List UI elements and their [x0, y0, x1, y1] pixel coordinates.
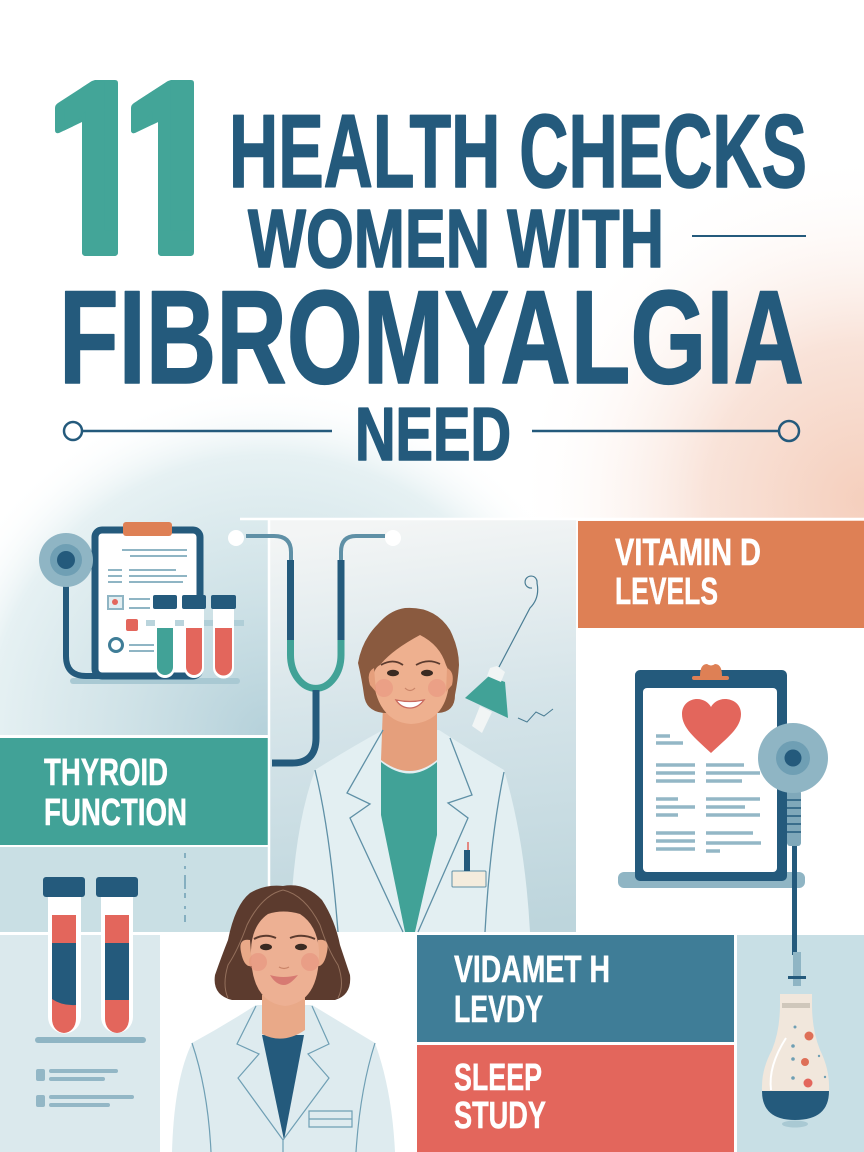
- panel divider vertical: [268, 519, 270, 932]
- label: vidamet h levdy: LEVDY: [454, 989, 543, 1031]
- title line: women with: WOMEN WITH: [248, 192, 664, 285]
- doctor two: [172, 885, 395, 1152]
- title line: need: NEED: [355, 392, 511, 476]
- label: sleep study: STUDY: [454, 1095, 546, 1137]
- shirt: [381, 762, 437, 932]
- label: vidamet h levdy: [417, 935, 734, 1042]
- label: thyroid function: [0, 738, 268, 845]
- icon: large stethoscope: [228, 530, 401, 763]
- heart: [682, 699, 741, 753]
- neck: [262, 995, 305, 1039]
- ears: [240, 940, 328, 966]
- stethoscope head: [758, 723, 828, 955]
- title: [55, 80, 805, 461]
- label: thyroid function: THYROID: [44, 752, 168, 794]
- icon: flask: [762, 952, 829, 1128]
- hair: [358, 608, 459, 713]
- eyes and smile: [375, 661, 446, 708]
- label: sleep study: SLEEP: [454, 1057, 542, 1099]
- icon: clipboard with heart: [618, 664, 828, 955]
- report lines: [656, 736, 761, 851]
- shirt: [262, 1035, 304, 1140]
- panel divider top: [240, 518, 864, 520]
- label: vitamin d levels: VITAMIN D: [615, 532, 761, 574]
- hair: [215, 885, 350, 1000]
- lapels: [315, 730, 504, 932]
- doctor one: [290, 608, 530, 932]
- face: [251, 912, 319, 1006]
- hair strands: [225, 890, 342, 998]
- label: vitamin d levels: [578, 521, 864, 628]
- label: sleep study: [417, 1045, 734, 1152]
- label: vitamin d levels: LEVELS: [615, 571, 718, 613]
- panel: flask background: [737, 935, 864, 1152]
- lapels: [192, 1006, 375, 1152]
- panel divider lower left: [0, 932, 160, 935]
- dashed guide: [184, 853, 186, 922]
- panel: test tube strip: [0, 847, 268, 932]
- panel: clipboard heart background: [576, 628, 864, 935]
- ears: [369, 668, 453, 692]
- title rule: beside women with: [692, 235, 806, 237]
- title numeral 11: 11: [55, 26, 195, 310]
- label: thyroid function: FUNCTION: [44, 792, 187, 834]
- eyes and smile: [249, 936, 319, 985]
- coat: [290, 730, 530, 932]
- list rows: [36, 1069, 134, 1107]
- title numeral 11: [55, 80, 194, 256]
- icon: green bell with wire: [465, 576, 553, 733]
- coat: [172, 1005, 395, 1152]
- title rule: right of need: [532, 421, 799, 441]
- panel: doctor two background: [160, 932, 417, 1152]
- name tag: [309, 1111, 352, 1127]
- icon: clipboard with stethoscope and tubes: [39, 522, 244, 684]
- panel: test tube lower: [0, 935, 160, 1152]
- badge and pen: [452, 842, 486, 887]
- neck: [381, 705, 437, 771]
- label: vidamet h levdy: VIDAMET H: [454, 949, 610, 991]
- icon: two test tubes: [35, 877, 146, 1043]
- title rule: left of need: [64, 422, 332, 440]
- panel: doctor portrait background: [270, 520, 576, 932]
- face: [373, 635, 449, 724]
